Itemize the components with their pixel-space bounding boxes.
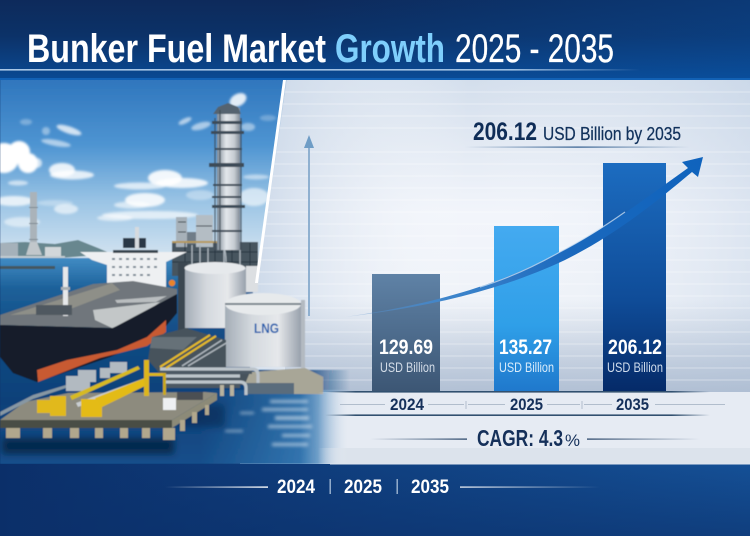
year axis labels: 2024 <box>390 396 425 414</box>
bar 2024: 129.69 <box>379 336 433 359</box>
lower chart bands <box>318 391 750 464</box>
headline value callout: USD Billion by 2035 <box>543 123 681 144</box>
footer years: 2024 <box>277 477 315 498</box>
CAGR label <box>370 425 700 451</box>
photo: port, tanker and LNG terminal <box>0 79 350 464</box>
headline value callout <box>465 118 690 148</box>
bar 2035: 206.12 <box>608 336 662 359</box>
LNG storage tank <box>225 293 305 368</box>
water reflections <box>225 400 312 446</box>
year axis labels <box>340 396 725 414</box>
growth arrow <box>345 157 703 317</box>
header band <box>0 0 750 80</box>
footer years: 2025 <box>344 477 382 498</box>
bar 2024: USD Billion <box>380 359 435 375</box>
pier with yellow loading arms <box>0 360 217 440</box>
footer years: 2035 <box>411 477 449 498</box>
bar 2025: 135.27 <box>499 336 552 359</box>
bar chart <box>372 163 666 392</box>
CAGR label: % <box>565 431 580 450</box>
headline value callout: 206.12 <box>473 118 537 146</box>
bar 2024 <box>372 274 440 392</box>
quay and pipework <box>148 328 323 396</box>
bar 2025 <box>494 226 559 392</box>
sky with clouds <box>0 79 300 269</box>
year axis labels: 2025 <box>510 396 543 414</box>
ship superstructure <box>80 227 187 290</box>
year axis labels: 2035 <box>616 396 649 414</box>
footer band <box>0 464 750 536</box>
storage tank, rear <box>178 262 258 340</box>
tanker ship <box>0 267 177 382</box>
vertical axis arrow <box>304 135 314 316</box>
white divider between photo and chart <box>255 80 286 283</box>
sea <box>0 258 350 464</box>
title: 2025 - 2035 <box>455 27 614 71</box>
tank label: LNG <box>254 320 279 336</box>
title: Bunker Fuel Market <box>27 27 326 71</box>
bar 2035 <box>603 163 666 392</box>
CAGR label: CAGR: 4.3 <box>477 425 563 451</box>
distant hills and chimney <box>0 240 112 258</box>
title <box>27 27 614 71</box>
bar 2025: USD Billion <box>499 359 554 375</box>
title: Growth <box>335 27 445 71</box>
footer years <box>277 477 449 498</box>
refinery structures <box>172 215 258 276</box>
right chart panel background <box>240 79 750 465</box>
distillation tower <box>209 103 245 250</box>
bar 2035: USD Billion <box>607 359 663 375</box>
